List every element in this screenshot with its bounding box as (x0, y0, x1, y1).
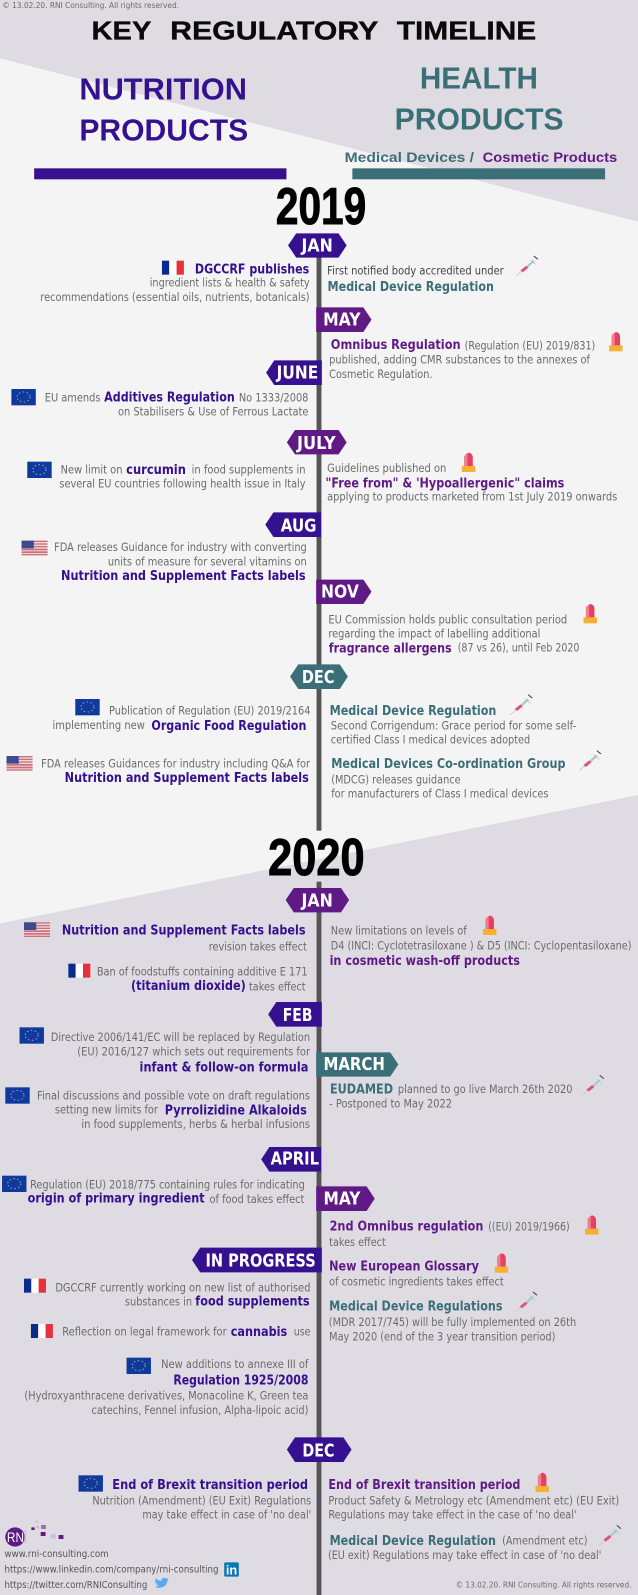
item: Omnibus Regulation: Omnibus Regulation (331, 338, 461, 353)
month tag: JAN 2020: JAN (300, 890, 333, 911)
title: REGULATORY (170, 17, 378, 46)
item: Brexit medical devices: Medical Device Regulation (330, 1534, 496, 1549)
item: DGCCRF publishes: ingredient lists & health & safety (150, 277, 310, 290)
month tag: FEB: FEB (283, 1004, 312, 1025)
heading: health products: PRODUCTS (395, 102, 564, 137)
item: D4 D5 limits: New limitations on levels of (331, 925, 467, 938)
heading: nutrition products: NUTRITION (79, 72, 247, 107)
item: FDA guidance: units of measure for several vitamins on (108, 555, 307, 569)
title: KEY (92, 17, 151, 46)
item: free from claims (326, 453, 617, 504)
month tag: DEC 2019: DEC (302, 666, 334, 687)
item: Regulation 1925/2008: catechins, Fennel infusion, Alpha-lipoic acid) (92, 1404, 308, 1418)
month tag: MAY 2019: MAY (323, 308, 361, 330)
panel: 2020 in progress and December (4, 1215, 631, 1591)
item: 2nd Omnibus regulation: ((EU) 2019/1966) (488, 1220, 570, 1234)
footer links (4, 1549, 218, 1591)
title (92, 17, 536, 46)
month tag: JAN 2019 (288, 233, 347, 258)
item: origin of primary ingredient: Regulation (EU) 2018/775 containing rules for indicating (30, 1178, 305, 1192)
item: titanium dioxide: Ban of foodstuffs containing additive E 171 (97, 966, 308, 979)
item: infant formula: Directive 2006/141/EC will be replaced by Regulation (51, 1031, 310, 1045)
month tag: FEB (268, 1002, 322, 1027)
item: FDA guidances Q&A: FDA releases Guidances for industry including Q&A for (41, 757, 311, 771)
item: curcumin (27, 462, 306, 491)
item: cannabis: cannabis (231, 1325, 287, 1340)
panel: 2020 January to May (2, 829, 631, 1211)
item: origin of primary ingredient: of food takes effect (210, 1193, 304, 1207)
item: New European Glossary: New European Glossary (329, 1260, 479, 1274)
item: first notified body: Medical Device Regulation (328, 280, 494, 295)
item: FDA guidance: FDA releases Guidance for industry with converting (54, 541, 307, 555)
item: titanium dioxide (68, 964, 308, 994)
item: 2nd Omnibus regulation (329, 1215, 599, 1250)
heading: nutrition products: PRODUCTS (79, 114, 248, 148)
item: free from claims: Guidelines published on (327, 462, 446, 476)
month tag: JUNE: JUNE (275, 361, 318, 383)
item: EUDAMED (329, 1075, 604, 1111)
item: FDA guidances Q&A (7, 756, 311, 786)
item: Brexit nutrition (79, 1475, 311, 1522)
heading: health products: Cosmetic Products (483, 150, 618, 166)
item: Pyrrolizidine Alkaloids: Pyrrolizidine Alkaloids (165, 1104, 307, 1118)
item: Omnibus Regulation (329, 332, 623, 382)
item: Brexit nutrition: End of Brexit transition period (112, 1478, 308, 1493)
item: DGCCRF publishes: recommendations (essential oils, nutrients, botanicals) (40, 291, 310, 305)
icon: Twitter bird (155, 1578, 169, 1588)
heading: health products: Medical Devices / (345, 150, 475, 166)
footer links: https://twitter.com/RNIConsulting (4, 1580, 147, 1591)
item: food supplements list: DGCCRF currently working on new list of authorised (55, 1281, 310, 1295)
item: food supplements list: substances in (125, 1296, 192, 1309)
heading: nutrition products (34, 72, 286, 179)
footer links: https://www.linkedin.com/company/rni-consulting (4, 1564, 218, 1575)
item: titanium dioxide: (titanium dioxide) (131, 979, 246, 994)
item: D4 D5 limits (330, 916, 631, 969)
month tag: APRIL (261, 1147, 321, 1172)
item: Brexit cosmetics (328, 1473, 619, 1522)
item: fragrance allergens: fragrance allergens (329, 642, 452, 656)
item: Pyrrolizidine Alkaloids: Final discussions and possible vote on draft regulations (37, 1089, 310, 1103)
month tag: DEC 2020 (287, 1437, 352, 1462)
month tag: JULY: JULY (295, 432, 336, 453)
item: fragrance allergens: regarding the impact of labelling additional (328, 628, 540, 641)
item: infant formula: infant & follow-on formula (140, 1061, 308, 1075)
item: Medical Device Regulations (329, 1292, 576, 1344)
month tag: AUG: AUG (281, 514, 317, 536)
item: MDCG: (MDCG) releases guidance (331, 773, 461, 787)
item: cannabis: Reflection on legal framework for (62, 1325, 227, 1339)
item: Additives Regulation (11, 389, 308, 419)
item: FDA guidance: Nutrition and Supplement Facts labels (61, 569, 306, 584)
item: food supplements list (24, 1279, 310, 1309)
month tag: NOV: NOV (321, 581, 359, 602)
month tag: APRIL: APRIL (271, 1148, 319, 1169)
month tag: IN PROGRESS: IN PROGRESS (205, 1249, 316, 1271)
item: Pyrrolizidine Alkaloids: in food supplements, herbs & herbal infusions (81, 1118, 310, 1132)
heading: health products (345, 61, 618, 179)
month tag: JUNE (266, 360, 322, 385)
year 2019: 2019 (276, 178, 366, 236)
item: Additives Regulation: on Stabilisers & Use of Ferrous Lactate (118, 406, 308, 419)
month tag: MARCH (316, 1052, 398, 1077)
footer links: www.rni-consulting.com (4, 1549, 109, 1560)
item: infant formula (20, 1027, 311, 1075)
item: infant formula: (EU) 2016/127 which sets out requirements for (77, 1046, 311, 1059)
item: Brexit nutrition: may take effect in case of 'no deal' (142, 1509, 311, 1522)
item: cannabis: use (294, 1325, 310, 1339)
item: curcumin: New limit on (61, 463, 122, 477)
month tag: JAN 2019: JAN (300, 235, 333, 256)
month tag: IN PROGRESS (192, 1248, 322, 1272)
item: food supplements list: food supplements (195, 1295, 310, 1309)
item: EUDAMED: EUDAMED (330, 1083, 393, 1097)
item: MDCG (331, 751, 601, 801)
item: first notified body (327, 256, 538, 295)
icon: LinkedIn: in (226, 1563, 237, 1577)
item: Additives Regulation: No 1333/2008 (239, 391, 308, 405)
item: DGCCRF publishes (40, 261, 310, 305)
item: curcumin: curcumin (126, 463, 186, 478)
item: fragrance allergens (328, 604, 597, 656)
item: Pyrrolizidine Alkaloids (5, 1087, 310, 1132)
item: DGCCRF publishes: DGCCRF publishes (195, 263, 309, 277)
item: FDA guidances Q&A: Nutrition and Supplement Facts labels (65, 771, 309, 786)
item: supplement facts revision (24, 922, 307, 954)
item: supplement facts revision: revision takes effect (209, 940, 307, 954)
item: Additives Regulation: Additives Regulation (104, 391, 235, 405)
item: Brexit nutrition: Nutrition (Amendment) (EU Exit) Regulations (92, 1494, 311, 1508)
item: Brexit medical devices (328, 1525, 621, 1563)
item: EUDAMED: - Postponed to May 2022 (329, 1097, 452, 1111)
item: 2nd Omnibus regulation: 2nd Omnibus regulation (330, 1220, 483, 1234)
item: New European Glossary (329, 1253, 508, 1289)
item: first notified body: First notified body accredited under (327, 265, 504, 278)
item: Medical Device Regulations: Medical Device Regulations (329, 1300, 503, 1314)
item: Additives Regulation: EU amends (45, 391, 101, 405)
item: curcumin: several EU countries following health issue in Italy (59, 478, 306, 491)
month tag: MARCH: MARCH (323, 1053, 385, 1074)
item: New European Glossary: of cosmetic ingredients takes effect (329, 1276, 504, 1289)
item: Organic Food Regulation: Publication of Regulation (EU) 2019/2164 (109, 705, 310, 718)
item: Organic Food Regulation: implementing new (52, 719, 145, 733)
month tag: MAY 2020: MAY (323, 1188, 361, 1209)
item: origin of primary ingredient (2, 1176, 305, 1207)
title: TIMELINE (397, 17, 536, 46)
month tag: DEC 2019 (290, 664, 348, 689)
item: Medical Device Regulation corrigendum: certified Class I medical devices adopted (331, 734, 530, 747)
item: Regulation 1925/2008: Regulation 1925/2008 (173, 1374, 308, 1388)
item: Pyrrolizidine Alkaloids: setting new limits for (55, 1104, 158, 1117)
panel: 2019 July to December (7, 430, 617, 801)
item: D4 D5 limits: in cosmetic wash-off products (330, 954, 520, 969)
logo: RNI (5, 1521, 63, 1547)
item: 2nd Omnibus regulation: takes effect (329, 1236, 386, 1250)
copyright top: © 13.02.20. RNI Consulting. All rights reserved. (2, 1, 179, 11)
item: origin of primary ingredient: origin of primary ingredient (28, 1192, 205, 1206)
item: Regulation 1925/2008 (24, 1358, 309, 1418)
item: Medical Device Regulation corrigendum: Medical Device Regulation (330, 704, 496, 719)
item: Regulation 1925/2008: New additions to annexe III of (161, 1358, 309, 1372)
heading: health products: HEALTH (420, 61, 538, 96)
item: FDA guidance (22, 541, 307, 584)
item: Omnibus Regulation: Cosmetic Regulation. (329, 368, 433, 382)
item: Brexit cosmetics: End of Brexit transition period (328, 1478, 520, 1493)
year 2020: 2020 (268, 829, 365, 887)
item: Brexit medical devices: (Amendment etc) (502, 1534, 588, 1548)
item: Organic Food Regulation (52, 699, 310, 734)
item: curcumin: in food supplements in (192, 463, 306, 477)
logo: RNI: RN (7, 1530, 24, 1546)
month tag: AUG (265, 512, 321, 537)
item: titanium dioxide: takes effect (249, 980, 306, 994)
timeline vertical bar (317, 257, 321, 1595)
item: Regulation 1925/2008: (Hydroxyanthracene derivatives, Monacoline K, Green tea (24, 1390, 308, 1403)
item: Medical Device Regulation corrigendum (330, 695, 576, 747)
item: supplement facts revision: Nutrition and Supplement Facts labels (62, 924, 306, 938)
item: fragrance allergens: (87 vs 26), until Feb 2020 (458, 642, 579, 655)
month tag: JAN 2020 (286, 888, 349, 912)
item: Organic Food Regulation: Organic Food Regulation (151, 719, 306, 734)
month tag: DEC 2020: DEC (302, 1439, 334, 1461)
